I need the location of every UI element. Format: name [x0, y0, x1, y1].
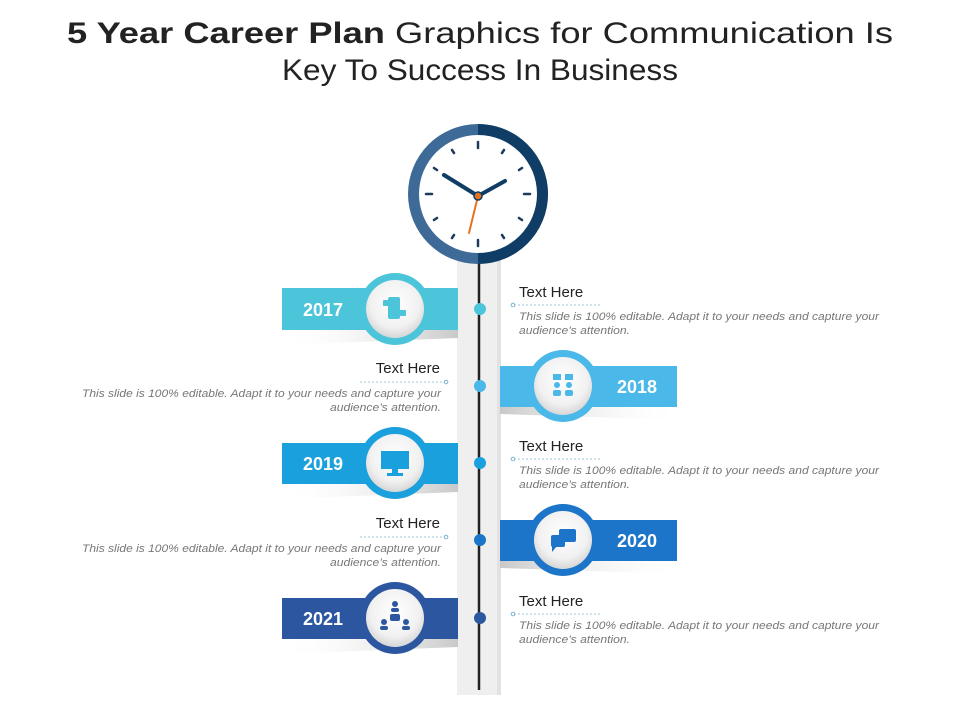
milestone 2018: 2018 [617, 377, 657, 397]
icon: phone chat [383, 297, 406, 319]
text block right 2: Text Here [519, 438, 583, 455]
text block right 3: audience’s attention. [519, 634, 630, 646]
timeline strip [457, 250, 501, 695]
text block left 2: audience’s attention. [330, 557, 441, 569]
text block left 1: audience’s attention. [330, 402, 441, 414]
text block right 3 [511, 593, 880, 646]
milestone 2020 [500, 504, 682, 576]
milestone 2019: 2019 [303, 454, 343, 474]
milestone 2021 [280, 582, 458, 654]
milestone 2021: 2021 [303, 609, 343, 629]
milestone 2020: 2020 [617, 531, 657, 551]
text block left 2: Text Here [376, 515, 440, 532]
text block right 3: Text Here [519, 593, 583, 610]
icon: team network [380, 601, 410, 630]
text block left 1: This slide is 100% editable. Adapt it to your needs and capture your [82, 388, 442, 400]
text block right 2: This slide is 100% editable. Adapt it to your needs and capture your [519, 465, 880, 477]
milestone 2017 [280, 273, 458, 345]
icon: clock [408, 124, 548, 264]
text block right 1: Text Here [519, 284, 583, 301]
text block left 2: This slide is 100% editable. Adapt it to your needs and capture your [82, 543, 442, 555]
text block right 2 [511, 438, 880, 491]
icon: chat bubbles [551, 529, 576, 552]
text block right 2: audience’s attention. [519, 479, 630, 491]
text block left 1: Text Here [376, 360, 440, 377]
timeline dots [474, 303, 486, 624]
milestone 2019 [280, 427, 458, 499]
milestone 2018 [500, 350, 682, 422]
text block right 1 [511, 284, 880, 337]
title: 5 Year Career Plan Graphics for Communication Is [67, 17, 893, 50]
text block right 3: This slide is 100% editable. Adapt it to your needs and capture your [519, 620, 880, 632]
text block right 1: audience’s attention. [519, 325, 630, 337]
icon: monitor [381, 451, 409, 476]
text block left 1 [82, 360, 448, 414]
title: Key To Success In Business [282, 54, 678, 87]
title [67, 17, 893, 87]
milestone 2017: 2017 [303, 300, 343, 320]
icon: people chat [553, 374, 573, 396]
text block left 2 [82, 515, 448, 569]
text block right 1: This slide is 100% editable. Adapt it to your needs and capture your [519, 311, 880, 323]
